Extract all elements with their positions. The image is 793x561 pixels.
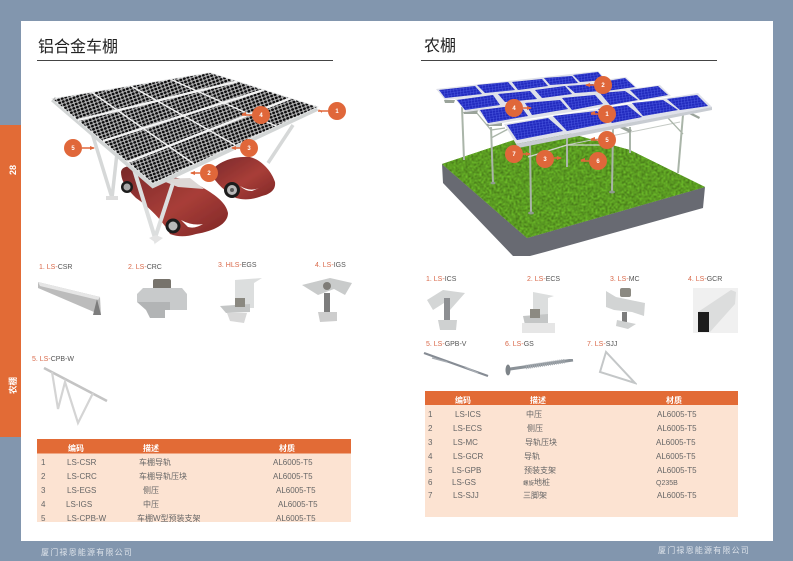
row 2: AL6005-T5 [273,472,313,481]
callout 5: 5 [605,138,609,144]
row 3: 3 [428,438,433,447]
support posts [462,107,683,213]
part 5 LS-GPB-V [424,341,488,376]
footer right company name: 厦门禄恩能源有限公司 [658,545,750,555]
part 4 LS-IGS: 4. LS-IGS [315,262,346,269]
callout 4: 4 [259,113,263,119]
row 1: 1 [428,410,433,419]
row 6: LS-GS [452,478,476,487]
callout 4 [241,106,270,124]
callout 2: 2 [601,83,605,89]
row 3: AL6005-T5 [276,486,316,495]
solar cell texture [439,72,708,140]
row 4: 导轨 [524,451,540,461]
part 2 LS-ECS [522,276,560,333]
table: greenhouse parts [425,391,738,517]
footer left company name: 厦门禄恩能源有限公司 [41,547,133,557]
row 7 [428,490,697,500]
part 1 LS-ICS [426,276,465,330]
row 3 [428,437,696,447]
part 2 LS-ECS: 2. LS-ECS [527,276,560,283]
row 7: 7 [428,491,433,500]
row 5: 5 [41,514,46,523]
part 5 LS-CPB-W: 5. LS-CPB-W [32,356,74,363]
row 5: 预装支架 [524,465,556,475]
part 4 LS-GCR [688,276,738,333]
callout 2 [190,164,218,182]
callout 2: 2 [207,171,211,177]
row 3 [41,485,316,495]
callout 6: 6 [596,159,600,165]
row 5: 车棚W型预装支架 [137,513,201,523]
part 6 LS-GS: 6. LS-GS [505,341,534,348]
row 1: AL6005-T5 [273,458,313,467]
row 5: LS-GPB [452,466,481,475]
callout 3 [231,139,258,157]
callout 1: 1 [605,112,609,118]
row 7: 三脚架 [523,490,547,500]
table header: 材质 [666,395,682,405]
table: carport parts [37,439,351,523]
row 4: AL6005-T5 [278,500,318,509]
row 5: 5 [428,466,433,475]
row 2: LS-CRC [67,472,97,481]
row 2: 2 [428,424,433,433]
row 3: 3 [41,486,46,495]
part 3 LS-MC: 3. LS-MC [610,276,640,283]
solar panel frames [436,71,712,148]
row 2 [428,423,697,433]
carport illustration [53,73,317,243]
part 3 HLS-EGS [218,262,262,323]
part 1 LS-ICS: 1. LS-ICS [426,276,457,283]
row 6 [428,477,678,487]
row 4: AL6005-T5 [656,452,696,461]
part 4 LS-IGS [302,262,352,322]
row 2: AL6005-T5 [657,424,697,433]
table header: 描述 [530,395,546,405]
agrivoltaic illustration [436,71,712,256]
row 5: LS-CPB-W [67,514,107,523]
row 1 [428,409,697,419]
parts rows: greenhouse [424,276,738,383]
row 1 [41,457,313,467]
row 4: 4 [41,500,46,509]
front posts [132,163,173,238]
callouts: greenhouse [505,76,616,170]
row 6: 螺旋地桩 [523,477,550,487]
callout 1 [318,102,346,120]
side tab label: 农棚 [8,377,18,394]
part 7 LS-SJJ: 7. LS-SJJ [587,341,617,348]
ground block [442,128,705,256]
row 1: LS-CSR [67,458,97,467]
row 6: 6 [428,478,433,487]
row 4: LS-GCR [453,452,483,461]
table header: 材质 [279,443,295,453]
row 4 [41,499,318,509]
part 2 LS-CRC: 2. LS-CRC [128,264,162,271]
table header [425,391,738,405]
callout 3: 3 [247,146,251,152]
part 1 LS-CSR: 1. LS-CSR [39,264,72,271]
part 3 LS-MC [606,276,645,329]
row 1: LS-ICS [455,410,481,419]
part 3 HLS-EGS: 3. HLS-EGS [218,262,257,269]
part 5 LS-CPB-W [32,356,107,423]
part 1 LS-CSR [38,264,101,315]
page number: 28 [8,165,18,175]
row 2: LS-ECS [453,424,482,433]
row 3: LS-EGS [67,486,96,495]
row 2: 2 [41,472,46,481]
row 4: 中压 [143,499,159,509]
callout 3: 3 [543,157,547,163]
row 1: AL6005-T5 [657,410,697,419]
callouts: carport [64,102,346,182]
row 2: 车棚导轨压块 [139,471,187,481]
callout 4: 4 [512,106,516,112]
row 5: AL6005-T5 [657,466,697,475]
front car [121,166,228,236]
callout 5 [64,139,95,157]
rail ends [444,100,700,133]
table header: 编码 [455,395,471,405]
part 7 LS-SJJ [587,341,635,383]
parts row: carport [32,262,352,423]
orange side tab [0,125,21,437]
row 2 [41,471,313,481]
panel: greenhouse [421,37,738,517]
row 7: LS-SJJ [453,491,479,500]
row 3: 导轨压块 [525,437,557,447]
row 3: LS-MC [453,438,478,447]
row 6: Q235B [656,480,678,487]
table header: 描述 [143,443,159,453]
part 5 LS-GPB-V: 5. LS-GPB-V [426,341,467,348]
back posts [92,125,293,198]
row 1: 1 [41,458,46,467]
row 5 [428,465,697,475]
panel: carport [32,38,352,523]
solar panels [439,72,708,140]
part 4 LS-GCR: 4. LS-GCR [688,276,722,283]
callout 7: 7 [512,152,516,158]
row 4 [428,451,696,461]
callout 1: 1 [335,109,339,115]
row 5 [41,513,316,523]
part 2 LS-CRC [128,264,187,318]
row 4: LS-IGS [66,500,92,509]
heading: greenhouse: 农棚 [424,37,456,55]
table header: 编码 [68,443,84,453]
row 7: AL6005-T5 [657,491,697,500]
part 6 LS-GS [505,341,573,376]
row 1: 中压 [526,409,542,419]
row 3: 侧压 [143,485,159,495]
row 1: 车棚导轨 [139,457,171,467]
rear car [210,157,275,199]
row 3: AL6005-T5 [656,438,696,447]
heading: carport: 铝合金车棚 [38,38,118,56]
row 2: 侧压 [527,423,543,433]
solar roof [53,73,317,185]
row 5: AL6005-T5 [276,514,316,523]
callout 5: 5 [71,146,75,152]
table header [37,439,351,454]
row 4: 4 [428,452,433,461]
